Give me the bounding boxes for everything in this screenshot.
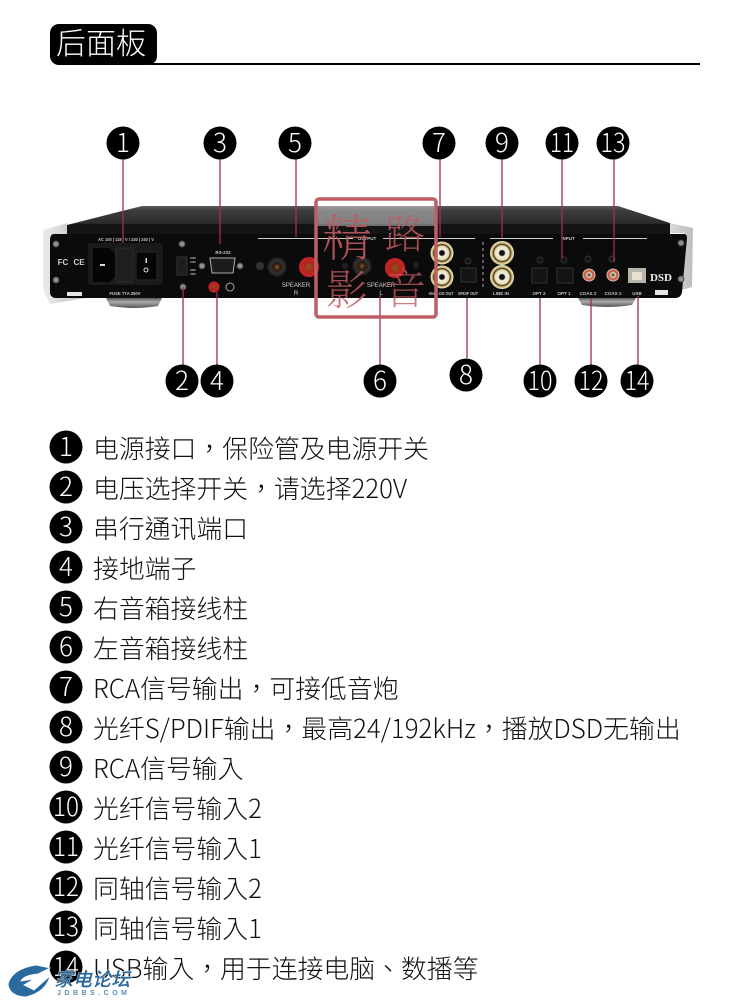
chassis top <box>67 206 670 236</box>
callout numbers on photo: 5 <box>288 123 302 160</box>
product photo: amplifier rear panel <box>43 206 693 308</box>
panel printing: COAX 2 <box>580 291 597 296</box>
feet <box>105 296 637 308</box>
power inlet and switch <box>88 243 163 285</box>
panel printing: FUSE T7A 250V <box>110 291 140 296</box>
watermark stamp: 影 <box>326 258 368 318</box>
panel printing: R <box>294 291 299 297</box>
panel printing: OPT 1 <box>557 291 571 296</box>
voltage selector: 240V <box>190 273 196 276</box>
legend item 12: 同轴信号输入2 <box>93 869 262 906</box>
callout numbers on photo <box>106 123 654 398</box>
legend item 3: 3 <box>59 507 73 544</box>
legend item 2: 电压选择开关，请选择220V <box>93 469 408 506</box>
legend item 4: 4 <box>59 547 73 584</box>
callout numbers on photo: 11 <box>550 123 574 160</box>
legend item 9: RCA信号输入 <box>93 749 244 786</box>
panel printing: COAX 1 <box>605 291 622 296</box>
voltage selector <box>177 257 196 276</box>
panel printing: SPEAKER <box>282 283 311 289</box>
panel printing: L <box>379 291 383 297</box>
forum watermark logo: JDBBS.COM <box>57 990 127 997</box>
silver side panels <box>43 223 693 304</box>
legend item 14: 14 <box>53 947 79 984</box>
panel printing: FC <box>58 258 69 267</box>
panel printing: OPT 2 <box>532 291 546 296</box>
forum watermark logo <box>8 965 132 997</box>
legend item 13: 13 <box>53 907 79 944</box>
legend item 10: 光纤信号输入2 <box>93 789 262 826</box>
voltage selector: 230V <box>190 269 196 272</box>
legend item 6: 6 <box>59 627 73 664</box>
legend item 7: 7 <box>59 667 73 704</box>
title: 后面板 <box>56 19 146 63</box>
panel printing: USB <box>632 291 642 296</box>
voltage selector: 100V <box>190 257 196 260</box>
coaxial ports <box>582 268 620 282</box>
speaker terminals <box>256 256 419 278</box>
legend item 8: 光纤S/PDIF输出，最高24/192kHz，播放DSD无输出 <box>93 709 681 746</box>
chassis rear face <box>50 234 687 298</box>
callout numbers on photo: 6 <box>373 361 387 398</box>
watermark stamp: 精 <box>322 199 372 271</box>
callout numbers on photo: 12 <box>578 361 604 398</box>
legend item 14: USB输入，用于连接电脑、数播等 <box>93 949 478 986</box>
callout numbers on photo: 13 <box>600 123 626 160</box>
callout numbers on photo: 3 <box>213 123 227 160</box>
title <box>50 19 700 65</box>
panel printing: LINE IN <box>493 291 509 296</box>
legend item 5: 5 <box>59 587 73 624</box>
RS-232 port <box>210 258 235 273</box>
watermark stamp: 音 <box>384 257 426 317</box>
panel printing: INPUT <box>561 236 575 241</box>
legend item 11: 光纤信号输入1 <box>93 829 262 866</box>
line in <box>490 241 514 289</box>
panel printing: OUTPUT <box>358 236 376 241</box>
callout numbers on photo: 4 <box>210 361 224 398</box>
legend list <box>50 427 681 986</box>
callout numbers on photo: 8 <box>459 355 473 392</box>
panel printing: DSD <box>650 272 672 284</box>
callout numbers on photo: 2 <box>175 361 189 398</box>
panel printing: ANALOG OUT <box>428 291 454 296</box>
callout numbers on photo: 7 <box>432 123 446 160</box>
legend item 7: RCA信号输出，可接低音炮 <box>93 669 399 706</box>
panel printing <box>58 236 672 297</box>
watermark stamp <box>316 199 436 318</box>
legend item 5: 右音箱接线柱 <box>93 589 248 626</box>
callout numbers on photo: 10 <box>528 361 552 398</box>
optical ports <box>461 256 615 283</box>
legend item 4: 接地端子 <box>93 549 196 586</box>
callout numbers on photo: 1 <box>116 123 130 160</box>
USB port <box>628 268 646 283</box>
grounding post <box>208 282 234 292</box>
legend item 8: 8 <box>59 707 73 744</box>
screws <box>53 240 684 290</box>
legend item 12: 12 <box>53 867 79 904</box>
legend item 1: 1 <box>59 427 73 464</box>
panel printing: SPEAKER <box>367 283 396 289</box>
legend item 6: 左音箱接线柱 <box>93 629 248 666</box>
voltage selector: 115V <box>190 261 196 264</box>
panel printing: RS-232 <box>215 250 231 255</box>
legend item 1: 电源接口，保险管及电源开关 <box>93 429 429 466</box>
legend item 11: 11 <box>53 827 79 864</box>
watermark stamp: 路 <box>385 203 425 260</box>
legend item 9: 9 <box>59 747 73 784</box>
legend item 13: 同轴信号输入1 <box>93 909 262 946</box>
legend item 3: 串行通讯端口 <box>93 509 248 546</box>
callout numbers on photo: 9 <box>495 123 509 160</box>
panel printing: CE <box>73 258 85 267</box>
callout numbers on photo: 14 <box>624 361 650 398</box>
forum watermark logo: 家电论坛 <box>54 965 132 992</box>
legend item 2: 2 <box>59 467 73 504</box>
callout leader lines <box>123 158 638 365</box>
legend item 4 <box>50 547 196 586</box>
panel printing: AC 100 | 115 | V / 230 | 240 | V <box>98 237 154 242</box>
legend item 10: 10 <box>53 787 79 824</box>
analog outputs <box>430 242 454 288</box>
panel printing: SPDIF OUT <box>458 291 478 296</box>
